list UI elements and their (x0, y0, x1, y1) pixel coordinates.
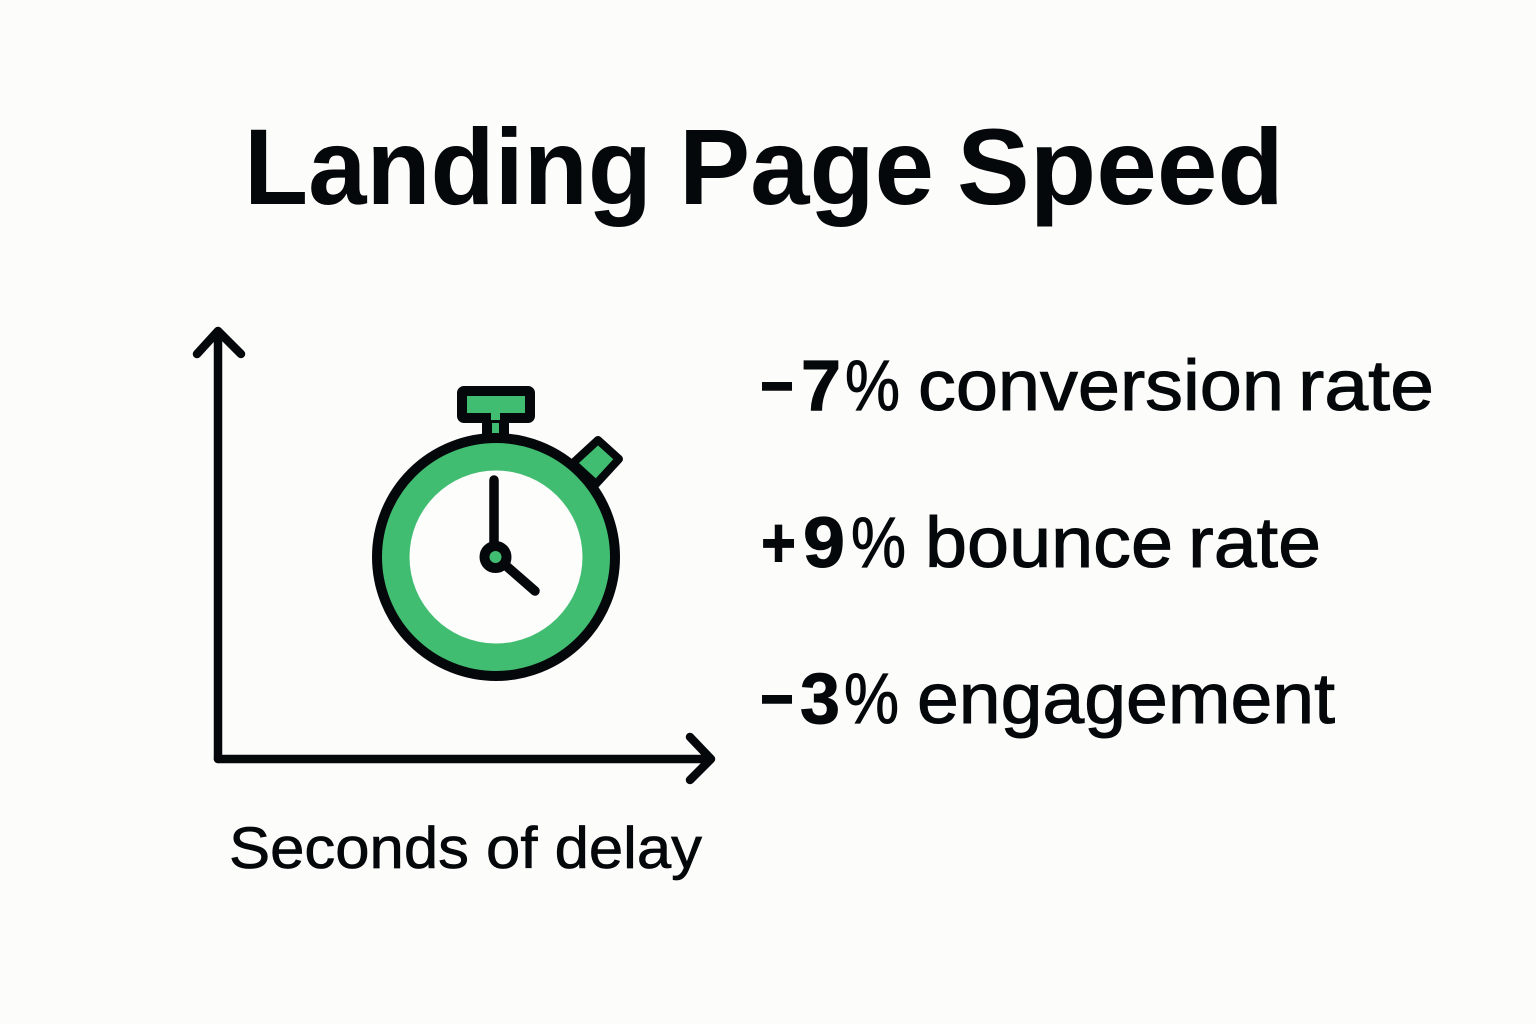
stat: bounce rate: 9 (803, 504, 845, 583)
stat: bounce rate: + (761, 504, 796, 583)
title: Landing (244, 106, 652, 227)
stopwatch center hub (484, 546, 506, 568)
stat: conversion rate: conversion (918, 347, 1284, 426)
stat: bounce rate (761, 504, 1321, 583)
title: Page (679, 106, 934, 227)
stat: bounce rate: bounce (925, 504, 1173, 583)
x axis label: Seconds of delay (229, 816, 702, 881)
stat: conversion rate: rate (1298, 347, 1434, 426)
stat: engagement (760, 660, 1335, 739)
stopwatch top button (462, 391, 530, 445)
stat: conversion rate: % (845, 347, 900, 426)
stat: conversion rate (760, 347, 1434, 426)
stat: bounce rate: rate (1188, 504, 1321, 583)
icon: stopwatch (377, 391, 619, 676)
y axis arrow (197, 331, 241, 759)
stopwatch side button (573, 440, 619, 484)
stat: engagement: % (844, 660, 899, 739)
title (244, 106, 1284, 227)
title: Speed (957, 106, 1284, 227)
stat: engagement: − (760, 660, 794, 739)
stat: conversion rate: − (760, 347, 794, 426)
stopwatch face (410, 470, 582, 644)
chart axes (197, 331, 711, 780)
stopwatch body ring (377, 438, 615, 676)
stat: conversion rate: 7 (801, 347, 841, 426)
stat: bounce rate: % (851, 504, 906, 583)
stopwatch hands (494, 480, 535, 591)
stat: engagement: 3 (800, 660, 840, 739)
stat: engagement: engagement (917, 660, 1335, 739)
stat list (760, 347, 1434, 739)
x axis arrow (218, 737, 711, 780)
